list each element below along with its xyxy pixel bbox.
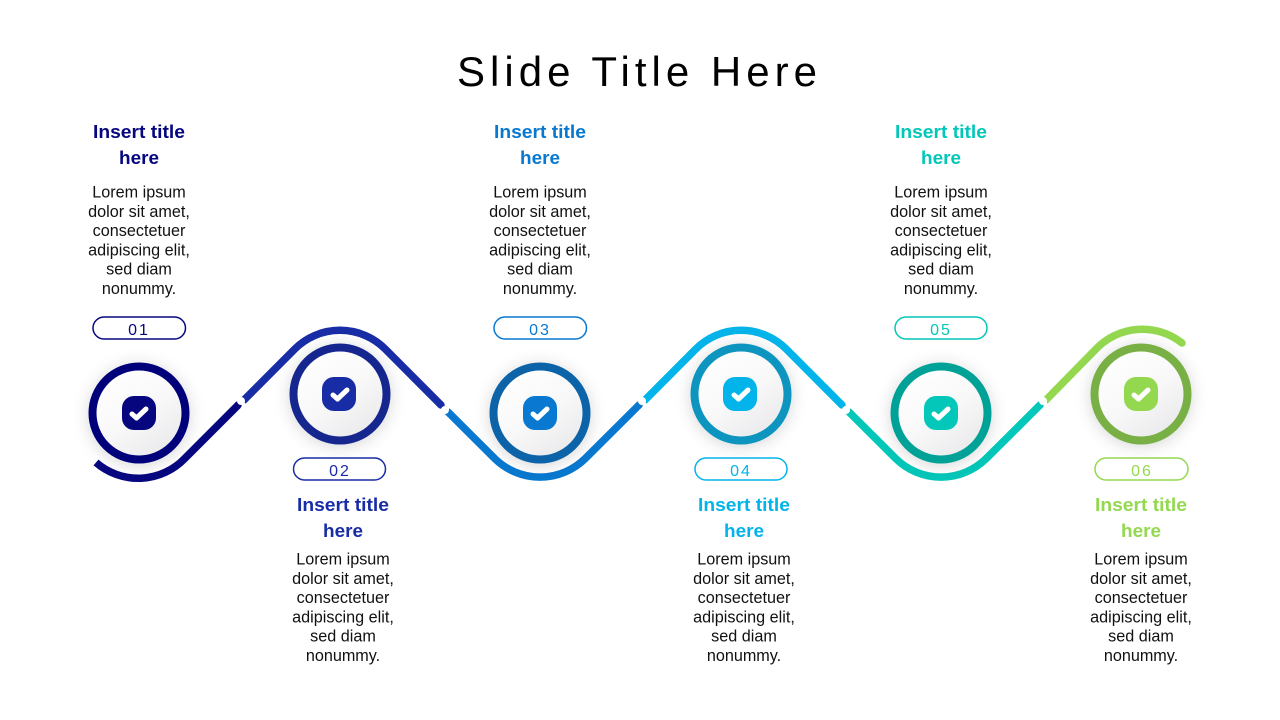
step 3 number pill: 03 — [529, 322, 551, 339]
step 6 number pill — [1095, 458, 1188, 480]
step 3 body text: dolor sit amet, — [489, 203, 591, 221]
step 6 body text: consectetuer — [1095, 589, 1188, 607]
icon: check badge 6 — [1124, 377, 1158, 411]
step 3 heading: Insert title — [494, 121, 586, 142]
step 4 number pill: 04 — [730, 463, 752, 480]
step 1 heading: here — [119, 147, 159, 168]
step 3 number pill — [494, 317, 586, 339]
step 1 body text: Lorem ipsum — [92, 184, 186, 202]
wave segment 1 — [96, 401, 242, 478]
step 3 body text: sed diam — [507, 260, 573, 278]
step 2 heading: here — [323, 520, 363, 541]
step 5 body text: nonummy. — [904, 280, 978, 298]
step 4 body text: sed diam — [711, 628, 777, 646]
step 2 body text: adipiscing elit, — [292, 608, 394, 626]
step 1 — [88, 121, 190, 460]
step 2 body text: nonummy. — [306, 647, 380, 665]
step 2 body text: consectetuer — [297, 589, 390, 607]
step 2 heading: Insert title — [297, 494, 389, 515]
step 6 heading: Insert title — [1095, 494, 1187, 515]
step 6 heading: here — [1121, 520, 1161, 541]
step 2 number pill: 02 — [329, 463, 351, 480]
wave segment 3 — [441, 401, 643, 477]
step 2 number pill — [294, 458, 386, 480]
step 6 body text: dolor sit amet, — [1090, 570, 1192, 588]
step 5 body text: Lorem ipsum — [894, 184, 988, 202]
step 5 body text: adipiscing elit, — [890, 241, 992, 259]
step 1 number pill — [93, 317, 186, 339]
step 3 ring — [494, 366, 586, 460]
icon: check badge 5 — [924, 396, 958, 430]
step 4 body text: adipiscing elit, — [693, 608, 795, 626]
step 5 number pill: 05 — [930, 322, 952, 339]
step 6 body text: adipiscing elit, — [1090, 608, 1192, 626]
step 6 ring — [1094, 348, 1188, 440]
step 4 — [693, 348, 795, 665]
step 1 body text: adipiscing elit, — [88, 241, 190, 259]
step 2 body text: dolor sit amet, — [292, 570, 394, 588]
step 3 — [489, 121, 591, 460]
step 4 ring — [694, 348, 788, 440]
step 3 heading: here — [520, 147, 560, 168]
step 5 body text: dolor sit amet, — [890, 203, 992, 221]
step 1 body text: sed diam — [106, 260, 172, 278]
step 6 body text: sed diam — [1108, 628, 1174, 646]
step 2 body text: Lorem ipsum — [296, 550, 390, 568]
step 1 number pill: 01 — [128, 322, 150, 339]
step 2 body text: sed diam — [310, 628, 376, 646]
step 4 body text: dolor sit amet, — [693, 570, 795, 588]
step 5 heading: Insert title — [895, 121, 987, 142]
step 6 body text: Lorem ipsum — [1094, 550, 1188, 568]
icon: check badge 2 — [322, 377, 356, 411]
step 6 number pill: 06 — [1131, 463, 1153, 480]
step 4 body text: Lorem ipsum — [697, 550, 791, 568]
wave segment 2 — [237, 330, 445, 409]
step 5 body text: consectetuer — [895, 222, 988, 240]
step 1 body text: dolor sit amet, — [88, 203, 190, 221]
step 5 heading: here — [921, 147, 961, 168]
step 2 — [292, 348, 394, 665]
title: Slide Title Here — [457, 48, 817, 95]
step 3 body text: nonummy. — [503, 280, 577, 298]
step 4 heading: here — [724, 520, 764, 541]
step 3 body text: adipiscing elit, — [489, 241, 591, 259]
wave segment 5 — [842, 401, 1044, 477]
icon: check badge 1 — [122, 396, 156, 430]
step 1 heading: Insert title — [93, 121, 185, 142]
step 2 ring — [294, 348, 386, 440]
icon: check badge 4 — [723, 377, 757, 411]
step 6 — [1090, 348, 1192, 665]
step 1 body text: consectetuer — [93, 222, 186, 240]
wave segment 4 — [638, 330, 846, 409]
step 6 body text: nonummy. — [1104, 647, 1178, 665]
step 1 ring — [92, 366, 186, 460]
step 3 body text: consectetuer — [494, 222, 587, 240]
step 5 ring — [894, 366, 988, 460]
step 4 heading: Insert title — [698, 494, 790, 515]
step 5 — [890, 121, 992, 460]
wave connector — [96, 329, 1186, 478]
step 4 body text: nonummy. — [707, 647, 781, 665]
step 4 body text: consectetuer — [698, 589, 791, 607]
step 4 number pill — [695, 458, 787, 480]
step 5 number pill — [895, 317, 987, 339]
step 1 body text: nonummy. — [102, 280, 176, 298]
wave segment 6 — [1039, 329, 1186, 405]
icon: check badge 3 — [523, 396, 557, 430]
step 3 body text: Lorem ipsum — [493, 184, 587, 202]
step 5 body text: sed diam — [908, 260, 974, 278]
